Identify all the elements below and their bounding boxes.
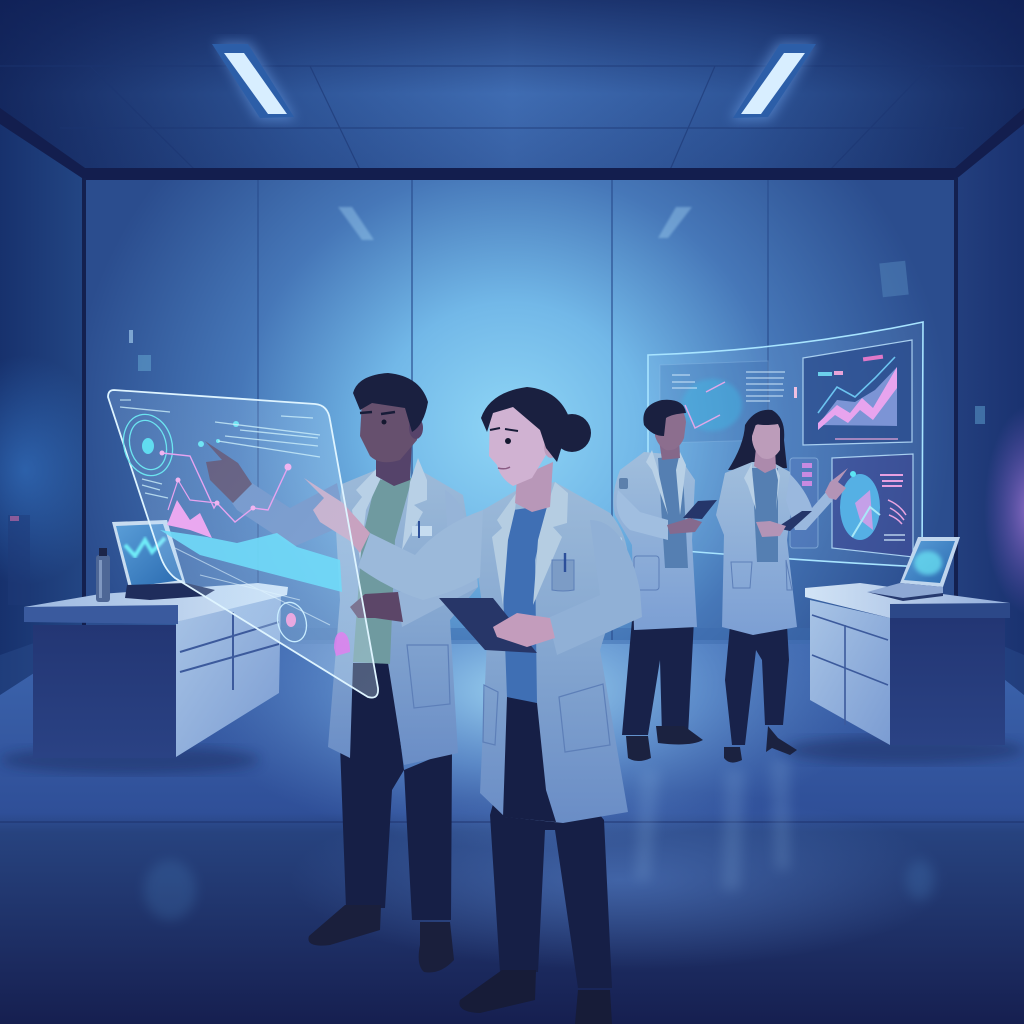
pink chart line xyxy=(162,453,288,522)
scientist: back woman xyxy=(716,410,848,763)
desk top xyxy=(24,583,288,622)
text lines xyxy=(120,400,320,498)
mouth xyxy=(498,467,510,469)
right wall purple glow xyxy=(984,405,1024,615)
pocket badge xyxy=(412,526,432,536)
line chart sub panel xyxy=(803,340,912,445)
desk shadow xyxy=(785,736,1024,764)
desk side xyxy=(810,600,890,745)
light glow xyxy=(730,42,818,120)
legs xyxy=(725,625,789,745)
face xyxy=(489,402,552,486)
legs xyxy=(490,760,612,988)
cyan area chart xyxy=(160,530,342,592)
laptop wave xyxy=(125,538,165,556)
pink peaks xyxy=(167,500,212,538)
ring graphic xyxy=(117,409,179,481)
left desk xyxy=(0,583,288,774)
pen xyxy=(418,521,420,538)
hair xyxy=(481,387,570,462)
network blob xyxy=(682,379,742,431)
pen xyxy=(564,553,566,572)
wall base xyxy=(85,628,955,644)
hair back xyxy=(728,410,787,470)
eyes and brows xyxy=(360,412,395,414)
ear xyxy=(409,417,423,439)
laptop screen chart xyxy=(914,551,942,575)
sleeve xyxy=(616,490,668,540)
patch xyxy=(619,478,628,489)
second line xyxy=(168,480,217,510)
floor light pool xyxy=(190,530,870,850)
lapels xyxy=(646,450,686,515)
ear xyxy=(544,436,558,458)
hair top xyxy=(748,412,784,438)
pink icon xyxy=(334,632,350,656)
shoes xyxy=(724,726,797,763)
shoes xyxy=(626,726,703,761)
neck xyxy=(515,462,553,512)
desk front xyxy=(33,625,177,758)
holding hand xyxy=(493,613,555,647)
shirt xyxy=(658,456,688,568)
wall skirting side xyxy=(0,625,1024,695)
shirt xyxy=(353,478,412,664)
neck xyxy=(376,442,412,486)
eyes xyxy=(382,420,386,424)
lower ring center xyxy=(286,613,296,627)
coat xyxy=(613,452,697,630)
arm pointing xyxy=(786,474,833,530)
drawer lines xyxy=(180,612,279,690)
desk front xyxy=(890,618,1005,745)
left wall xyxy=(0,115,85,695)
pockets xyxy=(483,684,610,752)
eyes and brows xyxy=(490,428,518,431)
floor line xyxy=(0,821,1024,823)
right desk xyxy=(785,583,1024,764)
shirt xyxy=(502,505,548,703)
floor reflections xyxy=(144,760,934,920)
legs xyxy=(622,620,694,735)
shoes xyxy=(308,905,454,972)
diagonal lower lines xyxy=(175,548,330,625)
tablet xyxy=(439,598,537,653)
ceiling light right xyxy=(730,42,818,120)
wall seams xyxy=(258,180,768,640)
right wall xyxy=(955,115,1024,695)
scientist: left man xyxy=(205,373,478,972)
ceiling shade xyxy=(0,0,1024,170)
hair xyxy=(643,400,686,436)
hair bun xyxy=(553,414,591,452)
lapels xyxy=(352,458,427,560)
shoes xyxy=(459,970,612,1024)
coat xyxy=(328,470,478,765)
lapels xyxy=(744,462,780,510)
ceiling xyxy=(0,0,1024,170)
desk side xyxy=(176,594,281,757)
desk top front edge xyxy=(24,605,178,624)
right sleeve xyxy=(548,520,642,655)
pink squares xyxy=(802,463,812,486)
wall small squares xyxy=(8,261,985,605)
shirt xyxy=(752,468,778,562)
hands xyxy=(667,518,702,534)
pointing hand xyxy=(825,468,848,500)
badge pocket xyxy=(552,560,574,591)
panel outline xyxy=(108,390,378,698)
head xyxy=(655,402,686,450)
sleeve pointing xyxy=(232,483,345,547)
light glow xyxy=(215,42,296,120)
face xyxy=(360,396,417,462)
desk top xyxy=(805,583,1010,618)
left laptop xyxy=(112,520,215,600)
right laptop xyxy=(867,537,960,601)
neck xyxy=(754,448,776,473)
scientist: back man xyxy=(613,400,717,761)
ring center xyxy=(142,438,154,454)
pointing sleeve xyxy=(358,510,483,600)
ceiling grid xyxy=(0,66,1024,170)
tablet xyxy=(683,500,717,519)
drawer lines xyxy=(812,615,888,725)
trousers top xyxy=(503,697,556,822)
left wall glow xyxy=(0,355,110,585)
hair xyxy=(353,373,428,432)
desk top front edge xyxy=(890,603,1010,618)
wall corners xyxy=(84,178,956,640)
pocket xyxy=(407,645,450,708)
lapels xyxy=(492,482,568,605)
bottle xyxy=(96,548,110,602)
sleeve patch xyxy=(606,538,626,563)
cyan dots xyxy=(198,421,239,447)
face xyxy=(752,423,780,459)
ceiling beam xyxy=(0,108,1024,180)
pointing hand xyxy=(205,441,252,503)
floor xyxy=(0,640,1024,1024)
holographic wall display xyxy=(648,322,923,567)
holographic front panel xyxy=(108,390,378,698)
eye xyxy=(505,438,511,444)
right hand xyxy=(350,592,403,622)
pockets xyxy=(731,560,792,590)
back wall xyxy=(85,178,955,640)
legs xyxy=(340,660,452,920)
neck xyxy=(659,438,680,460)
coat xyxy=(478,482,628,823)
tablet xyxy=(776,511,812,531)
text lines xyxy=(672,372,785,401)
top left sub panel xyxy=(660,361,797,443)
pointing hand xyxy=(304,478,370,553)
lower floor glow xyxy=(290,790,950,970)
lower ring xyxy=(273,599,311,645)
scientist: front woman xyxy=(304,387,642,1024)
pocket xyxy=(634,556,659,590)
desk shadow xyxy=(0,746,260,774)
ceiling light left xyxy=(212,42,296,120)
coat xyxy=(716,462,797,635)
wall reflections xyxy=(338,207,692,240)
right sleeve xyxy=(397,490,478,627)
small middle panels xyxy=(790,458,818,548)
chart dots xyxy=(160,450,292,510)
donut chart sub panel xyxy=(832,454,913,557)
holding hand xyxy=(756,521,786,537)
